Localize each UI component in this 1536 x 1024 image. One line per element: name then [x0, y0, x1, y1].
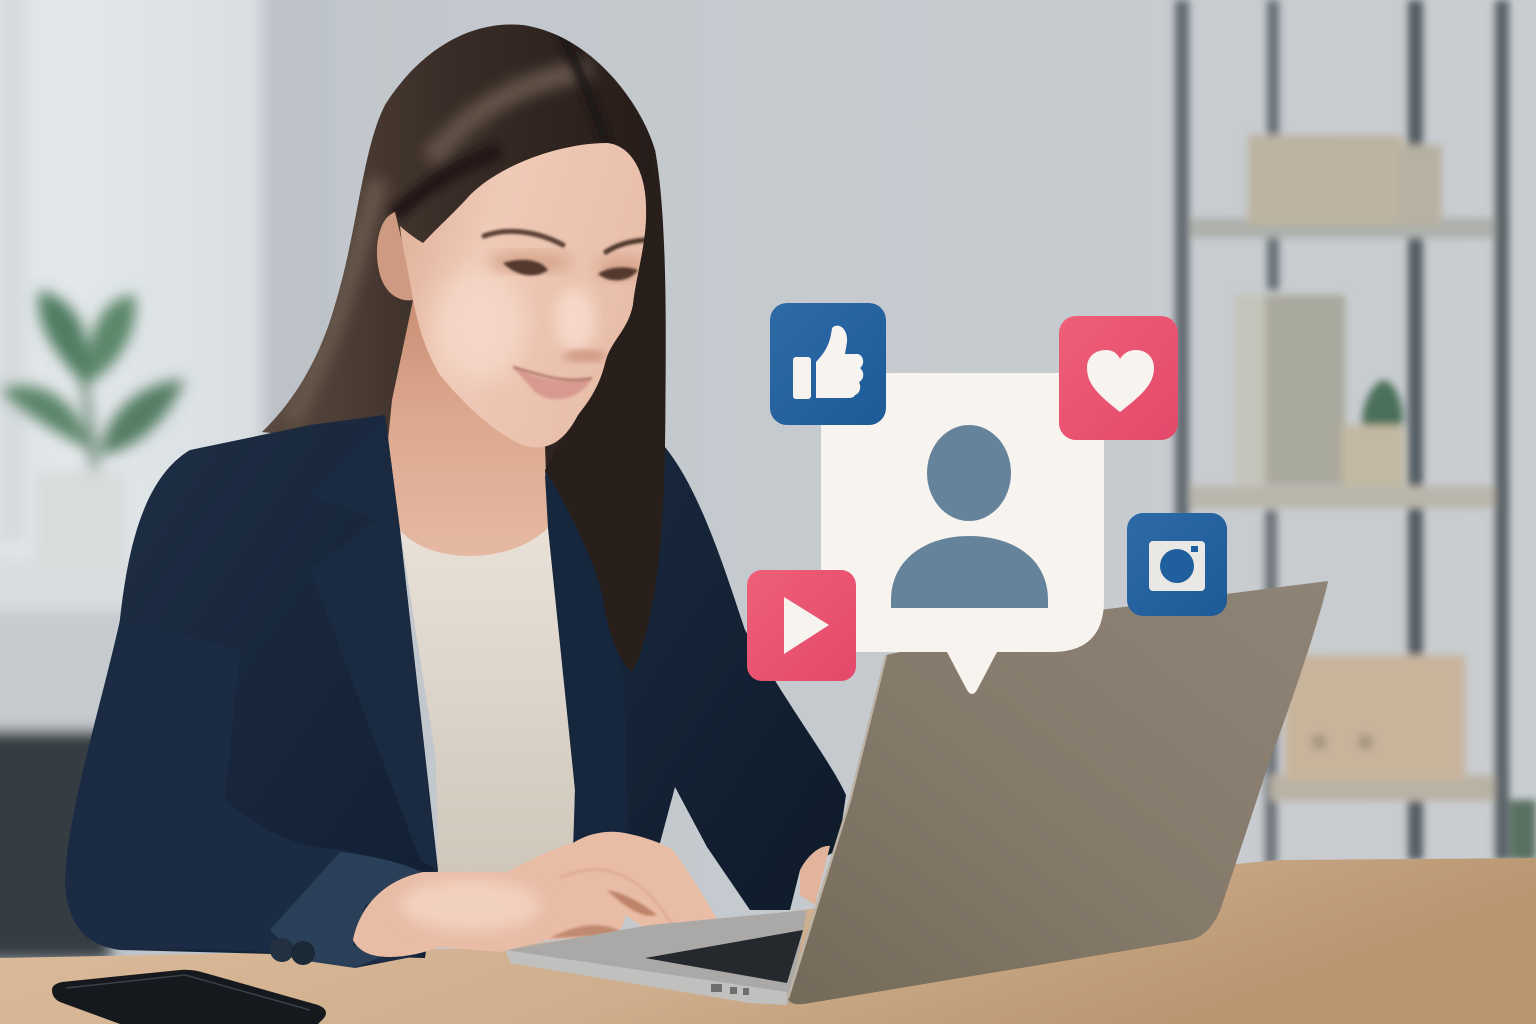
face shading [435, 252, 647, 380]
icon: user head [927, 425, 1011, 521]
icon: heart [1059, 316, 1178, 440]
lapels [308, 415, 437, 870]
cuff buttons [270, 938, 315, 965]
left hand [353, 832, 730, 957]
eyebrows [484, 231, 645, 252]
speech bubble with profile [821, 373, 1104, 694]
window and curtain area [0, 0, 332, 960]
right hand [800, 846, 830, 905]
icon: thumbs up [770, 303, 886, 425]
eyes [503, 260, 638, 280]
laptop [505, 581, 1328, 1005]
shirt [400, 528, 575, 872]
woman [65, 24, 846, 968]
laptop ports [711, 984, 749, 995]
lid edge [788, 655, 886, 998]
face [400, 143, 646, 448]
laptop front edge [505, 950, 787, 1005]
lips [513, 367, 592, 399]
hair right lock in front [545, 150, 665, 672]
table [0, 858, 1536, 1024]
neck and chest [385, 300, 548, 557]
laptop lid [788, 581, 1328, 1004]
blurred plant [0, 290, 185, 570]
laptop deck [507, 910, 807, 1003]
cuff [270, 852, 422, 968]
blazer torso [69, 415, 438, 958]
blazer right side and arm [545, 447, 846, 910]
icon: play button [747, 570, 856, 681]
hair back [262, 24, 666, 672]
icon: camera [1127, 513, 1227, 616]
blurred shelving with objects [1175, 0, 1536, 865]
sleeve [65, 620, 422, 968]
icon: user shoulders [891, 536, 1048, 608]
keyboard [645, 930, 803, 983]
ear [377, 212, 413, 300]
hair highlights [290, 30, 607, 420]
phone on table [52, 970, 326, 1024]
